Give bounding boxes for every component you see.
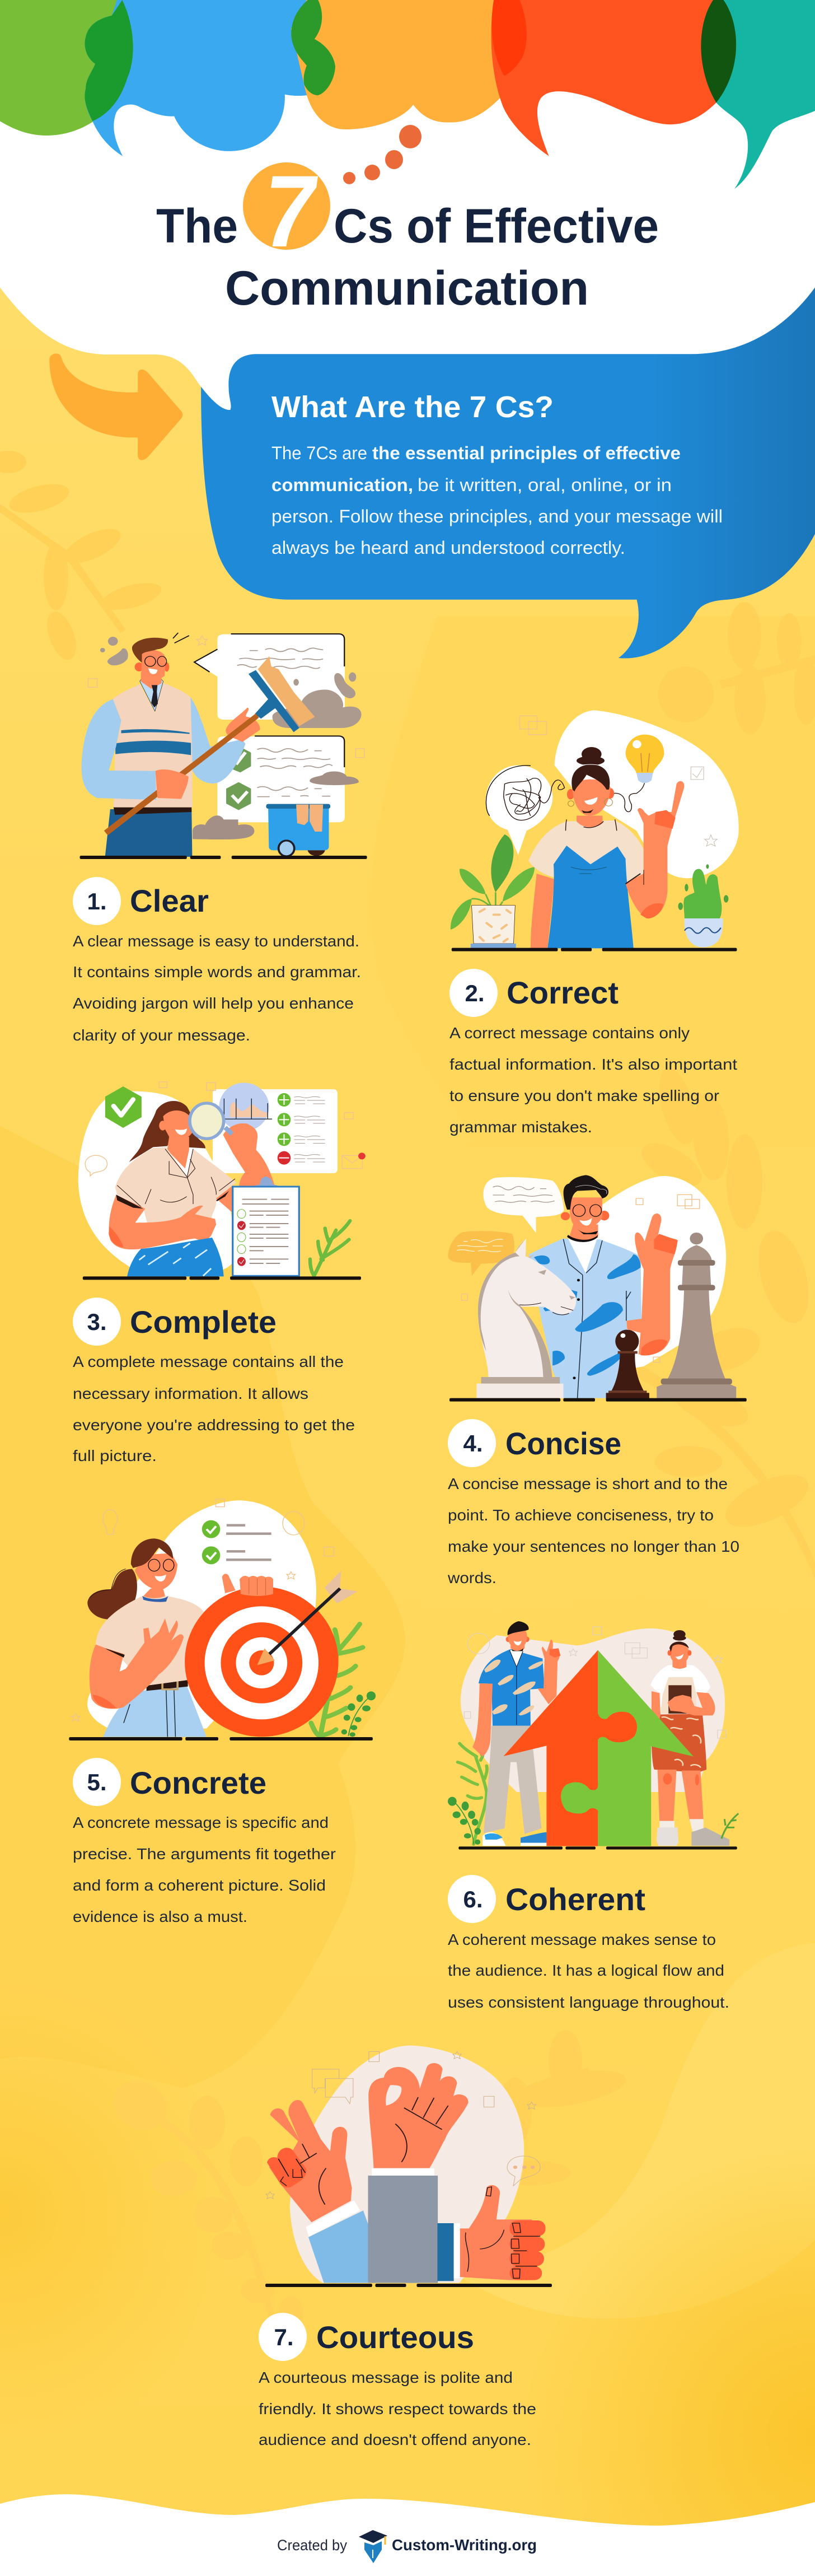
panel: 6 Coherent: [448, 1621, 738, 2011]
intro text: be it written, oral, online, or in: [418, 475, 672, 495]
body Complete: everyone you're addressing to get the: [73, 1416, 355, 1434]
body Complete: A complete message contains all the: [73, 1353, 344, 1370]
illustration: woman with light bulb: [451, 710, 739, 951]
body Concrete: A concrete message is specific and: [73, 1814, 329, 1831]
footer credit: [277, 2530, 537, 2563]
body Complete: [73, 1353, 355, 1464]
body Clear: Avoiding jargon will help you enhance: [73, 995, 354, 1012]
number badge 6: [448, 1875, 496, 1923]
number badge 3: [73, 1298, 121, 1346]
colored speech bubbles: [0, 0, 815, 189]
intro text: the essential principles of effective: [372, 443, 681, 463]
heading Complete: Complete: [130, 1304, 277, 1340]
body Coherent: the audience. It has a logical flow and: [448, 1962, 724, 1979]
number badge 7: [259, 2313, 307, 2361]
title: [156, 154, 659, 315]
body Concise: make your sentences no longer than 10: [448, 1538, 739, 1555]
body Correct: grammar mistakes.: [449, 1118, 592, 1136]
intro text: always be heard and understood correctly.: [271, 538, 625, 558]
footer credit: Created by: [277, 2537, 347, 2554]
heading Concise: Concise: [505, 1426, 621, 1461]
body Courteous: [259, 2369, 536, 2448]
body Clear: A clear message is easy to understand.: [73, 932, 359, 950]
number badge 5: [73, 1758, 121, 1806]
body Concrete: and form a coherent picture. Solid: [73, 1877, 326, 1894]
panel: 7 Courteous: [259, 2046, 552, 2448]
number badge 2: 2.: [465, 980, 485, 1006]
body Concise: A concise message is short and to the: [448, 1475, 728, 1492]
intro text: What Are the 7 Cs?: [271, 390, 554, 424]
arrow: [49, 353, 182, 460]
body Coherent: A coherent message makes sense to: [448, 1931, 716, 1948]
illustration: man cleaning text: [80, 633, 367, 859]
title: The: [156, 199, 238, 253]
heading Coherent: Coherent: [505, 1882, 645, 1917]
body Complete: necessary information. It allows: [73, 1385, 308, 1402]
intro text: The 7Cs are: [271, 443, 367, 463]
panel: 4 Concise: [447, 1175, 747, 1586]
number badge 3: 3.: [87, 1309, 107, 1335]
illustration: two people with puzzle arrow: [448, 1621, 738, 1850]
body Concise: point. To achieve conciseness, try to: [448, 1506, 714, 1524]
body Correct: factual information. It's also important: [449, 1056, 737, 1073]
body Correct: A correct message contains only: [449, 1024, 690, 1042]
panel: what are the 7 Cs: [201, 246, 815, 659]
panel: 1 Clear: [73, 633, 367, 1044]
body Concise: words.: [447, 1569, 497, 1586]
thought dots: [343, 125, 421, 184]
body Clear: clarity of your message.: [73, 1026, 250, 1044]
heading Concrete: Concrete: [130, 1765, 266, 1800]
body Concise: [447, 1475, 739, 1586]
illustration: woman with target: [69, 1499, 376, 1740]
illustration: woman with magnifier and checklist: [78, 1082, 366, 1280]
heading Correct: Correct: [507, 975, 619, 1010]
title: 7: [256, 154, 325, 268]
intro text: [271, 390, 723, 558]
number badge 1: [73, 877, 121, 925]
body Clear: It contains simple words and grammar.: [73, 963, 361, 981]
panel: 2 Correct: [449, 710, 739, 1136]
intro text: person. Follow these principles, and your message will: [271, 506, 723, 526]
intro text: communication,: [271, 475, 413, 495]
footer wave: [0, 2494, 815, 2576]
body Courteous: audience and doesn't offend anyone.: [259, 2431, 531, 2448]
title: Cs of Effective: [334, 199, 659, 253]
heading Courteous: Courteous: [316, 2320, 474, 2355]
body Courteous: A courteous message is polite and: [259, 2369, 513, 2386]
number badge 4: [448, 1419, 496, 1467]
body Concrete: [73, 1814, 336, 1925]
illustration: man with chess pieces: [448, 1175, 747, 1402]
body Courteous: friendly. It shows respect towards the: [259, 2400, 536, 2418]
body Correct: to ensure you don't make spelling or: [449, 1087, 719, 1104]
number badge 2: [449, 969, 498, 1017]
body Concrete: evidence is also a must.: [73, 1908, 247, 1925]
number badge 4: 4.: [463, 1430, 483, 1457]
number badge 1: 1.: [87, 888, 107, 914]
body Coherent: uses consistent language throughout.: [448, 1994, 729, 2011]
title: Communication: [225, 262, 589, 315]
number badge 5: 5.: [87, 1769, 107, 1795]
white header cloud: [0, 0, 815, 410]
body Coherent: [448, 1931, 729, 2011]
illustration: three hand gestures: [265, 2046, 552, 2287]
number badge 6: 6.: [463, 1886, 483, 1912]
icon: graduation cap pen logo: [359, 2530, 387, 2563]
body Complete: full picture.: [73, 1447, 157, 1464]
body Concrete: precise. The arguments fit together: [73, 1845, 336, 1863]
body Correct: [449, 1024, 737, 1136]
panel: 3 Complete: [73, 1082, 366, 1464]
body Clear: [73, 932, 361, 1044]
footer credit: Custom-Writing.org: [392, 2536, 537, 2554]
panel: 5 Concrete: [69, 1499, 376, 1925]
heading Clear: Clear: [130, 883, 209, 918]
number badge 7: 7.: [274, 2324, 294, 2350]
